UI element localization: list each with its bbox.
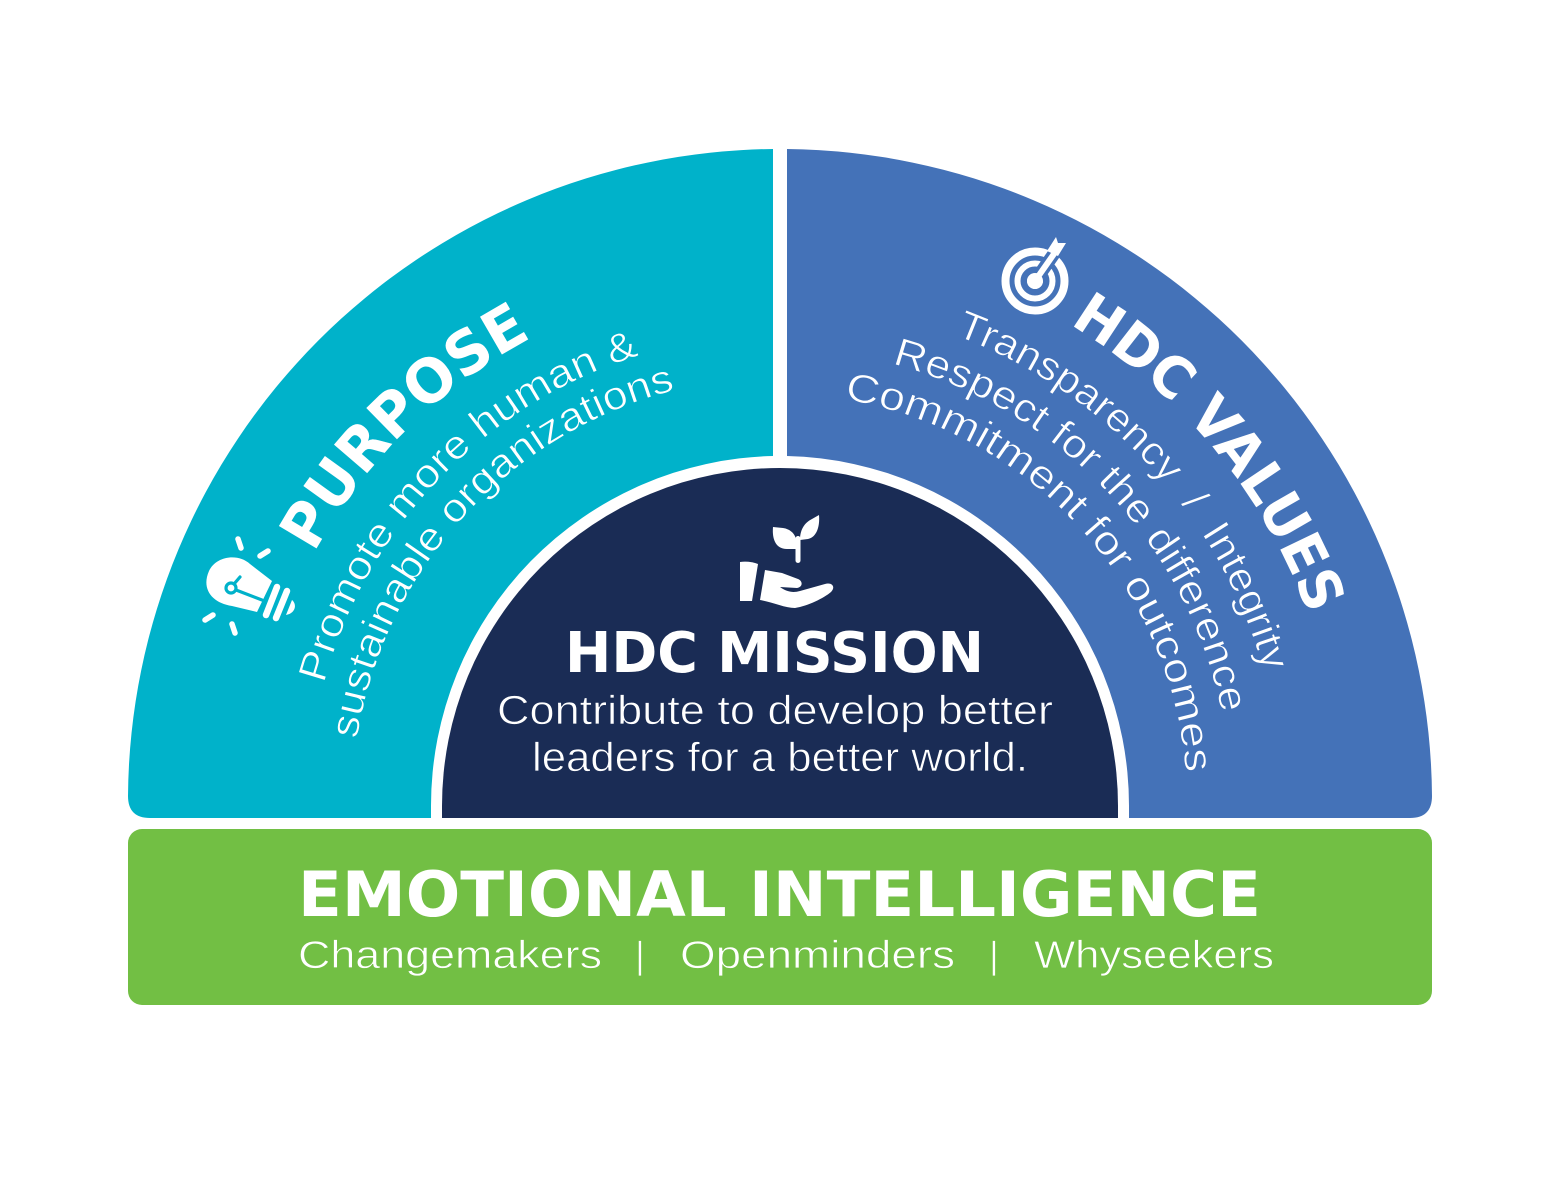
- divider label 1: |: [635, 935, 645, 977]
- text: mission line 2: leaders for a better world.: [532, 734, 1028, 780]
- text: values line 2: Respect for the difference: [896, 338, 1240, 710]
- heading: purpose: PURPOSE: [279, 302, 528, 548]
- icon: light bulb: [205, 539, 295, 633]
- panel: mission: [442, 468, 1118, 818]
- text: openminders: Openminders: [680, 934, 955, 977]
- divider label 2: |: [989, 935, 999, 977]
- heading: values: HDC VALUES: [1074, 292, 1344, 608]
- text: mission line 1: Contribute to develop better: [497, 687, 1053, 733]
- panel: purpose: [128, 149, 773, 818]
- heading: emotional intelligence: EMOTIONAL INTELLIGENCE: [298, 858, 1261, 931]
- text: values line 1: Transparency / Integrity: [966, 310, 1284, 666]
- heading: mission: HDC MISSION: [565, 621, 984, 686]
- icon: hand with sprout: [740, 515, 833, 608]
- panel: values: [787, 149, 1432, 818]
- text: purpose line 2: sustainable organizations: [338, 372, 673, 737]
- panel: emotional intelligence: [128, 829, 1432, 1005]
- text: whyseekers: Whyseekers: [1034, 934, 1274, 977]
- text: values line 3: Commitment for outcomes: [849, 375, 1206, 770]
- text: purpose line 1: Promote more human &: [299, 333, 638, 680]
- text: changemakers: Changemakers: [298, 934, 602, 977]
- icon: target: [1006, 237, 1066, 310]
